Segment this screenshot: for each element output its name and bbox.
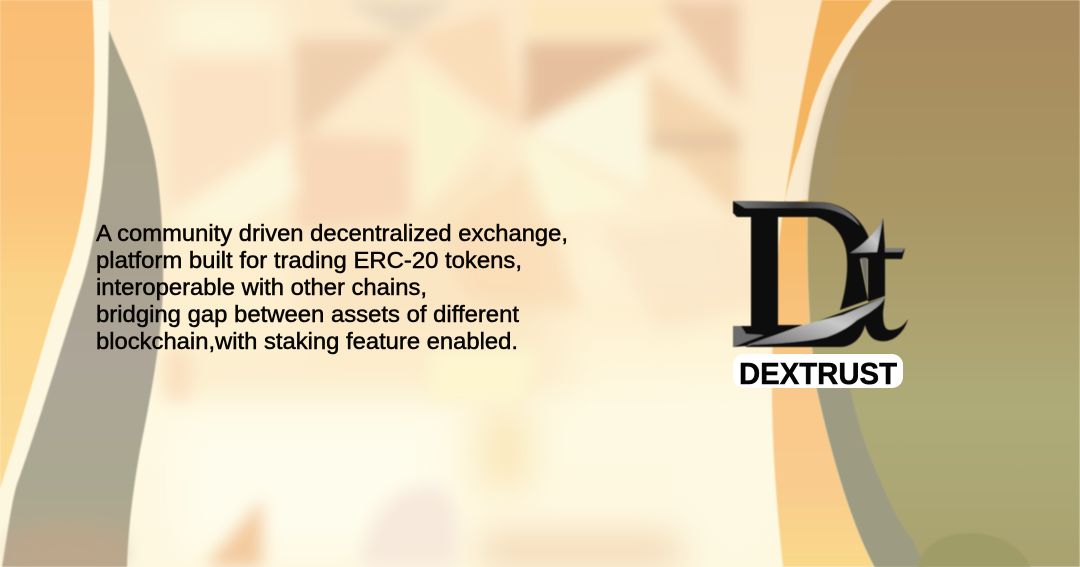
- description text: blockchain,with staking feature enabled.: [96, 328, 518, 354]
- background: blurred geometric texture: [109, 0, 822, 567]
- letter t stem and crossbar: [850, 218, 905, 302]
- letter D and t lower body: [745, 297, 908, 347]
- description text: platform built for trading ERC-20 tokens,: [96, 247, 522, 273]
- letter t crossbar highlight: [885, 248, 905, 252]
- description text: bridging gap between assets of different: [96, 301, 519, 327]
- letter D lower serif bevel: [733, 326, 764, 347]
- right brown panel: [807, 0, 1080, 567]
- logo: Dt monogram: [733, 201, 908, 347]
- left orange wave: [0, 0, 95, 490]
- letter D bevel highlights: [733, 201, 860, 226]
- right panel grey inner band: [817, 388, 925, 567]
- right panel lower circle: [918, 533, 1030, 567]
- right panel upper-left shade: [808, 60, 860, 200]
- description text: [96, 220, 568, 354]
- letter D stem, serifs and bowl: [733, 201, 869, 347]
- swoosh highlight: [747, 297, 885, 345]
- letter t highlight: [850, 218, 883, 253]
- bowl inner sliver: [861, 258, 867, 292]
- logo: DEXTRUST wordmark: DEXTRUST: [739, 356, 897, 391]
- left grey wave: [2, 30, 163, 567]
- grey wave lower tint: [8, 525, 125, 567]
- right cream stripe: [785, 0, 892, 205]
- right orange band: [772, 0, 875, 567]
- description text: A community driven decentralized exchange,: [96, 220, 568, 246]
- left cream edge: [0, 0, 109, 567]
- description text: interoperable with other chains,: [96, 274, 427, 300]
